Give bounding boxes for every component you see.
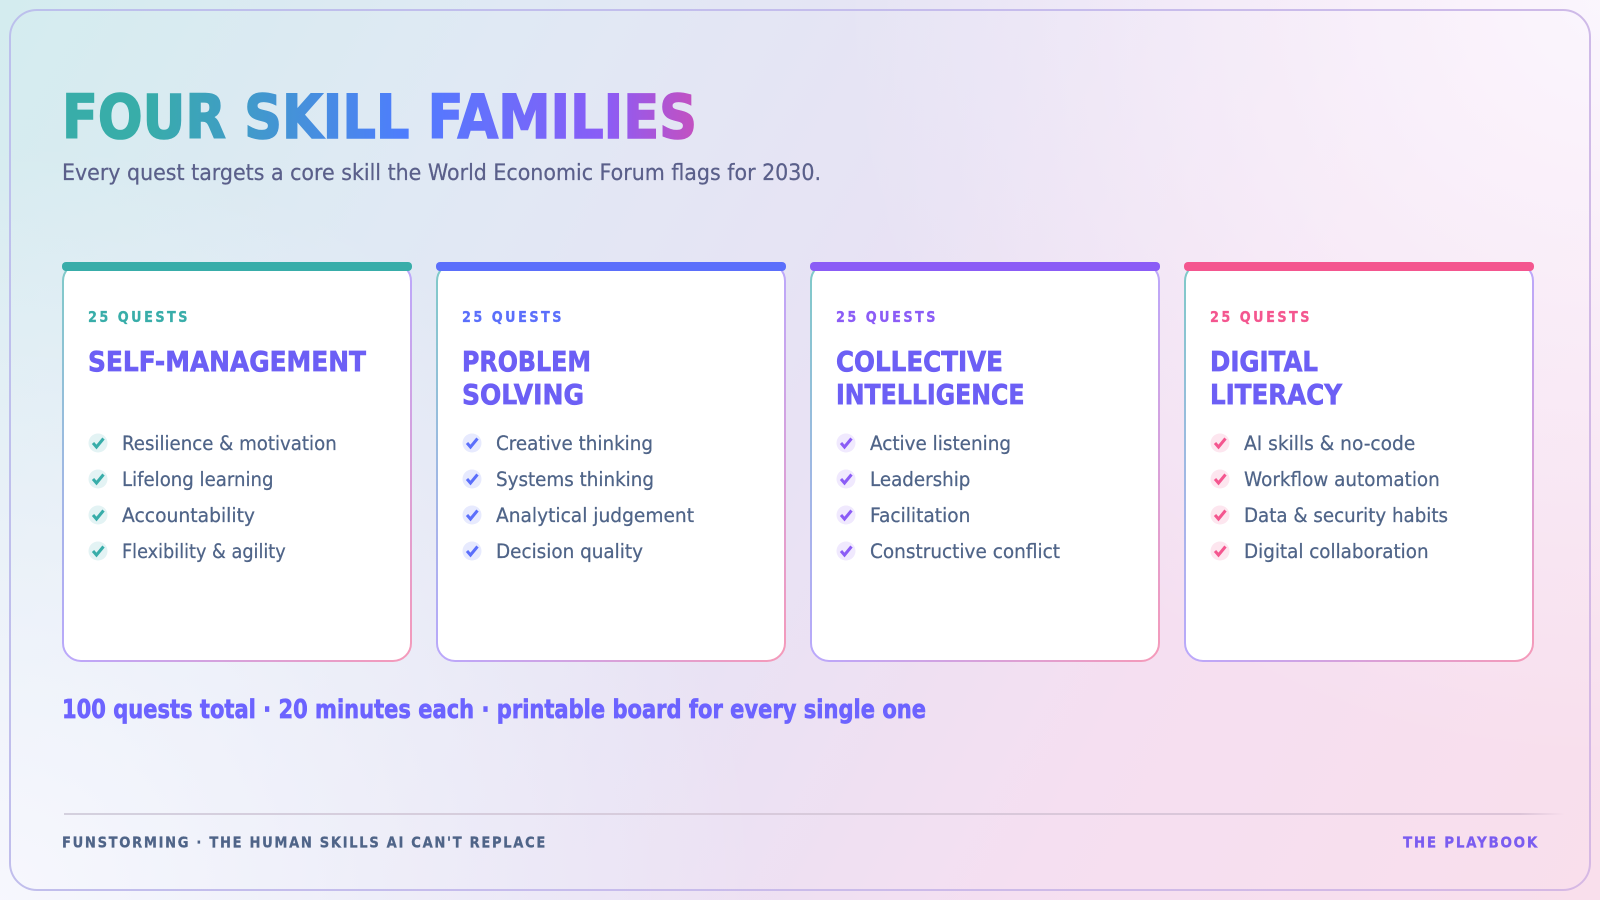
heading: SELF-MANAGEMENT <box>88 345 366 378</box>
heading <box>462 345 591 411</box>
heading: DIGITAL <box>1210 345 1318 378</box>
footer right: THE PLAYBOOK <box>1403 834 1539 852</box>
item: constructive conflict: Constructive conflict <box>870 540 1060 563</box>
skill list <box>836 432 1060 563</box>
item: flexibility: Flexibility & agility <box>122 540 286 563</box>
item: systems thinking: Systems thinking <box>496 468 654 491</box>
skill list <box>462 432 694 563</box>
heading: LITERACY <box>1210 378 1343 411</box>
heading: SOLVING <box>462 378 584 411</box>
quest count: 25 QUESTS <box>1210 308 1312 326</box>
heading <box>836 345 1024 411</box>
item: analytical judgement: Analytical judgement <box>496 504 694 527</box>
summary line: 100 quests total · 20 minutes each · printable board for every single one <box>62 695 926 725</box>
panel: collective intelligence <box>810 262 1160 661</box>
item: decision quality: Decision quality <box>496 540 643 563</box>
title: FOUR SKILL FAMILIES <box>62 82 697 153</box>
item: workflow automation: Workflow automation <box>1244 468 1440 491</box>
accent bar <box>1184 262 1534 271</box>
item: data and security: Data & security habits <box>1244 504 1448 527</box>
panel: self-management <box>62 262 412 661</box>
item: facilitation: Facilitation <box>870 504 970 527</box>
item: leadership: Leadership <box>870 468 970 491</box>
heading: COLLECTIVE <box>836 345 1003 378</box>
item: creative thinking: Creative thinking <box>496 432 653 455</box>
skill list <box>88 432 337 563</box>
subtitle: Every quest targets a core skill the World Economic Forum flags for 2030. <box>62 161 821 186</box>
accent bar <box>436 262 786 271</box>
heading <box>1210 345 1343 411</box>
skill list <box>1210 432 1448 563</box>
item: lifelong learning: Lifelong learning <box>122 468 274 491</box>
accent bar <box>810 262 1160 271</box>
item: resilience: Resilience & motivation <box>122 432 337 455</box>
quest count: 25 QUESTS <box>462 308 564 326</box>
item: ai skills: AI skills & no-code <box>1244 432 1415 455</box>
quest count: 25 QUESTS <box>88 308 190 326</box>
panel: digital literacy <box>1184 262 1534 661</box>
panel: problem solving <box>436 262 786 661</box>
item: active listening: Active listening <box>870 432 1011 455</box>
heading: INTELLIGENCE <box>836 378 1024 411</box>
item: accountability: Accountability <box>122 504 255 527</box>
heading: PROBLEM <box>462 345 591 378</box>
quest count: 25 QUESTS <box>836 308 938 326</box>
footer left: FUNSTORMING · THE HUMAN SKILLS AI CAN'T REPLACE <box>62 834 547 852</box>
item: digital collaboration: Digital collaboration <box>1244 540 1429 563</box>
accent bar <box>62 262 412 271</box>
